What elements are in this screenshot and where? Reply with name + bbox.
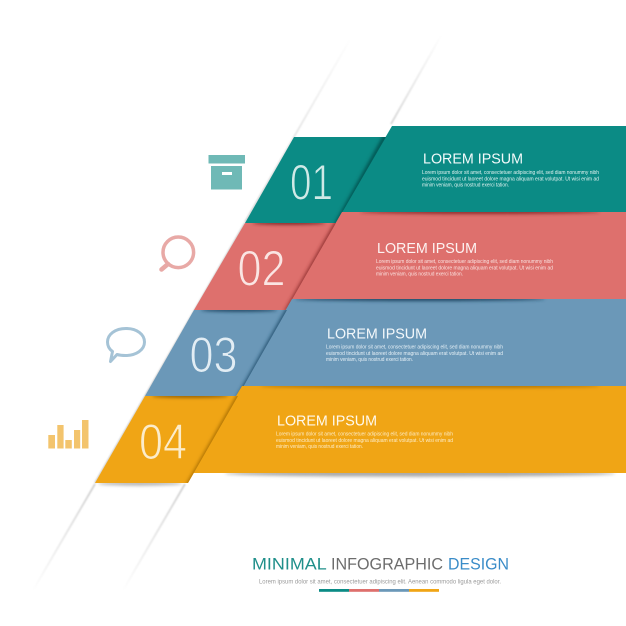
icon: bar chart [48,420,88,448]
body text: step 02: euismod tincidunt ut laoreet dolore magna aliquam erat volutpat. Ut wisi enim ad [376,265,553,271]
number: 04: 04 [139,414,187,470]
panel: step 01 [245,126,626,225]
body text: step 01 [422,170,599,188]
title: DESIGN [448,554,509,574]
panel: step 03 [145,297,626,398]
panel: step 04 [95,384,626,485]
heading: step 01: LOREM IPSUM [423,152,523,168]
shadow under bottom band [225,470,615,477]
body text: step 02 [376,259,553,277]
band: step 02 [292,212,626,299]
tab shading: step 03 [201,308,288,398]
body text: step 01: euismod tincidunt ut laoreet dolore magna aliquam erat volutpat. Ut wisi enim ad [422,176,599,182]
icon: magnifying glass [162,237,194,270]
body text: step 04 [276,432,453,450]
infographic canvas [46,57,626,592]
colour key bar [319,589,439,592]
band: step 03 [242,299,626,386]
band shading: step 02 [360,210,600,214]
heading: step 03: LOREM IPSUM [327,326,427,342]
subtitle: Lorem ipsum dolor sit amet, consectetuer adipiscing elit. Aenean commodo ligula eget dolor. [259,578,501,586]
panel: step 02 [194,210,626,312]
tab shading: step 01 [336,135,386,225]
tab: step 01 [245,137,386,223]
body text: step 04: minim veniam, quis nostrud exerci tation. [276,444,363,450]
band: step 01 [342,126,626,212]
band shading: step 04 [260,384,600,388]
tab: step 02 [194,223,336,310]
body text: step 03 [326,345,503,363]
heading: step 04: LOREM IPSUM [277,414,377,430]
heading: step 02: LOREM IPSUM [377,241,477,257]
shadow under left tab 04 [98,481,182,486]
band shading: step 03 [295,297,545,301]
tab shading: step 04 [152,394,239,485]
body text: step 01: Lorem ipsum dolor sit amet, consectetuer adipiscing elit, sed diam nonummy nibh [422,170,599,176]
number: 01: 01 [290,154,333,210]
title: MINIMAL [252,554,326,574]
tab: step 03 [145,310,287,396]
body text: step 01: minim veniam, quis nostrud exerci tation. [422,182,509,188]
tab shading: step 02 [253,221,337,312]
icon: speech bubble [108,328,144,362]
diagonal background strip shadows [32,34,442,592]
band: step 04 [190,386,626,473]
body text: step 03: minim veniam, quis nostrud exerci tation. [326,357,413,363]
tab: step 04 [95,396,238,483]
body text: step 04: euismod tincidunt ut laoreet dolore magna aliquam erat volutpat. Ut wisi enim ad [276,438,453,444]
title: INFOGRAPHIC [331,554,443,574]
body text: step 02: minim veniam, quis nostrud exerci tation. [376,271,463,277]
number: 02: 02 [238,240,286,296]
body text: step 03: euismod tincidunt ut laoreet dolore magna aliquam erat volutpat. Ut wisi enim ad [326,351,503,357]
body text: step 04: Lorem ipsum dolor sit amet, consectetuer adipiscing elit, sed diam nonummy nibh [276,432,453,438]
icon: archive box [208,155,245,190]
body text: step 03: Lorem ipsum dolor sit amet, consectetuer adipiscing elit, sed diam nonummy nibh [326,345,503,351]
body text: step 02: Lorem ipsum dolor sit amet, consectetuer adipiscing elit, sed diam nonummy nibh [376,259,553,265]
number: 03: 03 [190,327,238,383]
